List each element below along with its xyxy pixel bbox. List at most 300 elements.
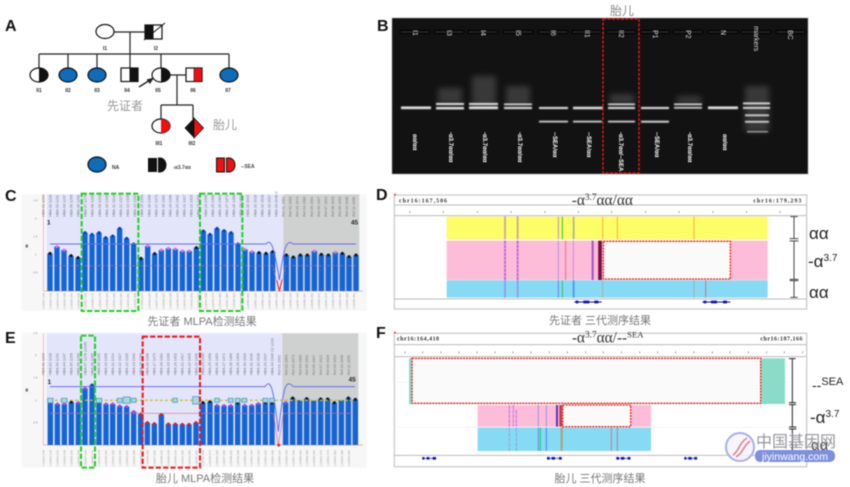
probe labels: HBA-03 1231 — [55, 195, 59, 217]
heading: F: F — [376, 325, 386, 342]
size labels: L10428-172 — [90, 450, 94, 466]
probe labels: HBA-13 1335 — [126, 195, 130, 217]
chart E: 1 — [48, 379, 52, 386]
lane labels: I1 — [411, 30, 418, 36]
probe labels: Ref-09 1633 — [338, 197, 342, 217]
chart E: 8 — [25, 388, 28, 394]
size labels: L10430-184 — [104, 450, 108, 466]
probe labels: HBA-34 1545 C2 1234 — [271, 338, 275, 375]
title: SEA — [627, 330, 644, 340]
panel A: pedigree — [5, 18, 255, 172]
reference lines — [50, 384, 355, 432]
panel F: fetus sequencing: αα — [811, 437, 829, 454]
probe labels: Ref-04 1586 — [303, 197, 307, 217]
probe labels: Ref-05 1591 — [310, 197, 314, 217]
size labels: L10464-388 — [345, 293, 349, 309]
band haze — [438, 76, 769, 132]
probe labels: Ref-11 1656 — [347, 355, 351, 375]
pedigree labels: II6 — [190, 88, 196, 94]
probe labels: HBA-05 1259 — [70, 195, 74, 217]
genotype labels: -α3.7αα/αα — [686, 132, 692, 163]
pedigree labels: II1 — [36, 88, 42, 94]
lane labels: P2 — [684, 30, 691, 39]
probe labels: HBA-29 1494 — [236, 353, 240, 375]
probe labels: HBA-21 1417 — [180, 353, 184, 375]
probe labels: HBA-10 1306 — [104, 353, 108, 375]
genotype labels: --SEA/αα — [585, 132, 591, 158]
probe labels: HBA-33 1537 — [267, 195, 271, 217]
probe labels: HBA-24 1446 — [201, 353, 205, 375]
caption E: 胎儿 MLPA检测结果 — [156, 471, 254, 485]
chart C: 1 — [35, 253, 37, 257]
probe labels: HBA-08 1285 — [91, 195, 95, 217]
size labels: L10424-148 — [63, 450, 67, 466]
caption C: 先证者 MLPA检测结果 — [147, 314, 257, 328]
size labels: L10445-274 — [211, 293, 215, 309]
size labels: L10456-340 — [284, 450, 288, 466]
size labels: L10440-244 — [173, 450, 177, 466]
size labels: L10463-382 — [338, 293, 342, 309]
probe labels: Ref-01 1552 — [277, 355, 281, 375]
probe labels: Ref-08 1629 — [331, 197, 335, 217]
gel background — [392, 18, 808, 174]
probe labels: HBA-18 1381 — [160, 353, 164, 375]
sequencing view D: chr16:179,293 — [753, 198, 802, 204]
gel bands — [401, 102, 770, 132]
genotype labels F: SEA — [821, 376, 844, 388]
size labels: L10438-232 — [161, 293, 165, 309]
probe labels: Ref-10 1648 — [345, 197, 349, 217]
probe labels: HBA-28 1489 — [232, 195, 236, 217]
probe labels: HBA-04 1247 — [63, 353, 67, 375]
highlight box: deletion — [143, 337, 200, 468]
caption F: 胎儿 三代测序结果 — [554, 471, 646, 485]
title: -α — [572, 330, 585, 347]
lane labels: I4 — [479, 30, 486, 36]
genotype labels: αα/αα — [721, 134, 727, 151]
size labels: L10421-130 — [42, 450, 46, 466]
size labels: L10457-346 — [296, 293, 300, 309]
probe labels: HBA-12 1327 — [119, 195, 123, 217]
size labels: L10431-190 — [111, 450, 115, 466]
sequencing view D — [394, 192, 807, 309]
probe labels: HBA-20 1402 — [173, 353, 177, 375]
probe labels: Ref-05 1591 — [305, 355, 309, 375]
probe labels: HBA-26 1463 — [218, 195, 222, 217]
size labels: L10450-304 — [246, 293, 250, 309]
sequencing view D: chr16:167,506 — [399, 198, 448, 204]
chart E: 2 — [35, 353, 37, 357]
probe labels: Ref-04 1586 — [298, 355, 302, 375]
individual II3 — [88, 68, 106, 82]
heading: A: A — [5, 18, 17, 35]
probe labels: Ref-07 1612 — [319, 355, 323, 375]
probe labels: HBA-20 1402 — [176, 195, 180, 217]
size labels: L10422-136 — [48, 293, 52, 309]
size labels: L10436-220 — [146, 450, 150, 466]
probe labels: HBA-16 1368 — [147, 195, 151, 217]
chart C: 2.5 — [33, 199, 38, 203]
read tracks — [409, 358, 785, 404]
chart E: 1.5 — [33, 376, 38, 380]
size labels: L10453-322 — [267, 293, 271, 309]
probe labels: HBA-25 1458 — [211, 195, 215, 217]
size labels: L10447-286 — [225, 293, 229, 309]
size labels: L10437-226 — [154, 293, 158, 309]
genotype labels: -α3.7αα/--SEA — [617, 132, 623, 172]
size labels: L10462-376 — [326, 450, 330, 466]
individual II6 — [186, 68, 202, 82]
chart C: 45 — [351, 220, 359, 227]
size labels: L10442-256 — [187, 450, 191, 466]
size labels: L10423-142 — [56, 450, 60, 466]
chart E: 1 — [35, 398, 37, 402]
size labels: L10457-346 — [291, 450, 295, 466]
genotype labels — [411, 132, 727, 172]
size labels: L10451-310 — [250, 450, 254, 466]
probe labels: HBA-23 1439 — [197, 195, 201, 217]
individual I1 — [96, 24, 114, 38]
fetus label: 胎儿 — [213, 118, 237, 132]
outlier markers — [48, 397, 274, 404]
genotype labels: --SEA/αα — [653, 132, 659, 158]
probe labels: HBA-13 1335 — [125, 353, 129, 375]
size labels: L10446-280 — [215, 450, 219, 466]
size labels: L10452-316 — [260, 293, 264, 309]
probe labels: HBA-01 1204 — [42, 353, 46, 375]
genotype labels D: αα — [809, 224, 829, 243]
size labels: L10443-262 — [197, 293, 201, 309]
watermark — [726, 433, 836, 463]
size labels: L10429-178 — [97, 450, 101, 466]
lane labels: II2 — [617, 30, 624, 38]
probe labels: HBA-27 1471 — [222, 353, 226, 375]
highlight boxes: duplicated probes — [82, 194, 242, 311]
legend — [88, 157, 255, 172]
size labels: L10449-298 — [236, 450, 240, 466]
probe labels: Ref-09 1633 — [333, 355, 337, 375]
probe labels: HBA-19 1396 — [167, 353, 171, 375]
size labels: L10434-208 — [132, 450, 136, 466]
size labels: L10432-196 — [118, 450, 122, 466]
size labels: L10433-202 — [126, 293, 130, 309]
panel F: fetus sequencing: -α — [810, 408, 826, 427]
highlight box: fetus lane — [603, 19, 639, 173]
size labels: L10435-214 — [140, 293, 144, 309]
title: 3.7 — [585, 331, 597, 341]
size labels: L10465-394 — [352, 293, 356, 309]
probe labels: HBA-25 1458 — [208, 353, 212, 375]
genotype labels: --SEA/αα — [551, 132, 557, 158]
probe labels: HBA-30 1503 — [243, 353, 247, 375]
chart E: 0.5 — [33, 421, 38, 425]
size labels: L10433-202 — [125, 450, 129, 466]
probe labels: HBA-06 1266 — [76, 353, 80, 375]
probe labels: HBA-08 1285 — [90, 353, 94, 375]
genotype labels: -α3.7αα/αα — [447, 132, 453, 163]
variant stripes — [505, 217, 706, 298]
size labels: L10441-250 — [183, 293, 187, 309]
sequencing view F — [394, 330, 807, 467]
genotype labels: αα/αα — [411, 134, 417, 151]
watermark logo — [726, 433, 754, 461]
individual II1 — [30, 68, 48, 82]
size labels: L10423-142 — [55, 293, 59, 309]
size labels: L10424-148 — [62, 293, 66, 309]
size labels: L10434-208 — [133, 293, 137, 309]
probe labels: HBA-18 1381 — [161, 195, 165, 217]
lane labels: BC — [786, 30, 793, 40]
probe labels: HBA-30 1503 — [246, 195, 250, 217]
probe labels: Ref-10 1648 — [340, 355, 344, 375]
probe labels: HBA-17 1373 — [153, 353, 157, 375]
probe labels: HBA-09 1293 — [97, 353, 101, 375]
size labels: L10439-238 — [168, 293, 172, 309]
probe labels: HBA-05 1259 — [69, 353, 73, 375]
proband label: 先证者 — [107, 99, 143, 113]
size labels: L10438-232 — [160, 450, 164, 466]
title: -α — [572, 192, 585, 209]
size labels: L10459-358 — [310, 293, 314, 309]
size labels: L10452-316 — [257, 450, 261, 466]
size labels: L10465-394 — [347, 450, 351, 466]
probe labels: HBA-15 1350 — [139, 353, 143, 375]
chart E: 2.5 — [33, 331, 38, 335]
individual II5 proband — [152, 68, 170, 82]
probe labels: HBA-02 1218 — [48, 195, 52, 217]
size labels: L10430-184 — [105, 293, 109, 309]
title: αα/-- — [597, 330, 627, 347]
heading: C: C — [5, 188, 17, 205]
lane labels: II1 — [583, 30, 590, 38]
size labels: L10442-256 — [190, 293, 194, 309]
size labels: L10449-298 — [239, 293, 243, 309]
legend: --SEA — [241, 164, 255, 170]
caption D: 先证者 三代测序结果 — [549, 313, 651, 327]
probe labels: HBA-22 1425 — [187, 353, 191, 375]
probe labels: HBA-19 1396 — [168, 195, 172, 217]
probe labels: Ref-06 1607 — [317, 197, 321, 217]
heading: D: D — [376, 187, 388, 204]
pedigree labels: III1 — [156, 141, 163, 147]
pedigree labels: II4 — [124, 88, 130, 94]
probe labels: HBA-27 1471 — [225, 195, 229, 217]
size labels: L10432-196 — [119, 293, 123, 309]
probe labels: HBA-06 1266 — [77, 195, 81, 217]
size labels: L10427-166 — [83, 450, 87, 466]
size labels: L10463-382 — [333, 450, 337, 466]
watermark text: 中国基因网 — [756, 433, 836, 451]
probe labels: HBA-34 1545 C — [274, 191, 278, 217]
pedigree labels: I1 — [103, 46, 107, 52]
probe labels: HBA-21 1417 — [183, 195, 187, 217]
size labels: L10444-268 — [204, 293, 208, 309]
probe labels: HBA-14 1342 — [132, 353, 136, 375]
probe labels: Ref-08 1629 — [326, 355, 330, 375]
probe labels: HBA-32 1528 — [260, 195, 264, 217]
probe labels: HBA-17 1373 — [154, 195, 158, 217]
size labels: L10439-238 — [167, 450, 171, 466]
MLPA bars — [48, 385, 358, 445]
size labels: L10458-352 — [298, 450, 302, 466]
probe labels: Ref-07 1612 — [324, 197, 328, 217]
probe labels: HBA-10 1306 — [105, 195, 109, 217]
MLPA bars — [47, 228, 359, 291]
lane labels: P1 — [651, 30, 658, 39]
arrow to proband — [139, 78, 154, 87]
probe labels: HBA-24 1446 — [204, 195, 208, 217]
size labels: L10460-364 — [317, 293, 321, 309]
individual II4 — [121, 68, 138, 82]
title: αα/αα — [597, 192, 633, 209]
size labels: L10453-322 — [264, 450, 268, 466]
size labels: L10445-274 — [208, 450, 212, 466]
lane labels: markers — [752, 26, 759, 52]
size labels: L10455-334 — [277, 450, 281, 466]
genotype labels: -α3.7αα/αα — [481, 132, 487, 163]
lane labels — [411, 26, 793, 52]
probe labels: HBA-12 1327 — [118, 353, 122, 375]
probe labels: HBA-02 1218 — [49, 353, 53, 375]
probe labels: HBA-11 1314 — [112, 195, 116, 217]
individual III1 — [152, 119, 170, 133]
size labels: L10444-268 — [201, 450, 205, 466]
gene track — [574, 300, 730, 303]
probe labels: HBA-07 1278 12345 — [83, 342, 87, 375]
size labels: L10448-292 — [229, 450, 233, 466]
probe labels: Ref-01 1552 — [282, 197, 286, 217]
panel C: proband MLPA chart — [5, 188, 367, 328]
individual III2 fetus — [184, 118, 204, 138]
size labels: L10447-286 — [222, 450, 226, 466]
panel D: proband sequencing: -α — [808, 252, 824, 271]
panel D: proband sequencing: 3.7 — [824, 253, 838, 264]
size labels: L10462-376 — [331, 293, 335, 309]
highlight box: duplication — [81, 336, 95, 468]
sequencing view F: chr16:164,418 — [397, 336, 440, 342]
size labels: L10437-226 — [153, 450, 157, 466]
probe labels: HBA-31 1516 — [253, 195, 257, 217]
size labels: L10422-136 — [49, 450, 53, 466]
lane labels: I3 — [445, 30, 452, 36]
read tracks — [447, 217, 768, 239]
chart C: 0.5 — [33, 271, 38, 275]
heading: E: E — [5, 330, 16, 347]
size labels: L10455-334 — [282, 293, 286, 309]
chart E — [22, 331, 367, 468]
size labels: L10461-370 — [319, 450, 323, 466]
pedigree labels: III2 — [189, 141, 196, 147]
probe labels: HBA-22 1425 — [190, 195, 194, 217]
individual I2 — [144, 23, 165, 40]
probe labels: HBA-11 1314 — [111, 353, 115, 375]
probe labels: Ref-02 1569 — [284, 355, 288, 375]
size labels: L10446-280 — [218, 293, 222, 309]
probe labels: HBA-31 1516 — [250, 353, 254, 375]
fetus label above gel: 胎儿 — [610, 4, 634, 18]
chart C: 8 — [25, 243, 28, 249]
size labels: L10428-172 — [91, 293, 95, 309]
size labels: L10451-310 — [253, 293, 257, 309]
legend: -α3.7αα — [173, 165, 192, 171]
probe labels: HBA-29 1494 — [239, 195, 243, 217]
probe labels: HBA-33 1537 — [264, 353, 268, 375]
size labels: L10441-250 — [180, 450, 184, 466]
probe labels: HBA-04 1247 — [62, 195, 66, 217]
size labels: L10459-358 — [305, 450, 309, 466]
chart C: 1 — [47, 220, 51, 227]
probe labels: HBA-16 1368 — [146, 353, 150, 375]
genotype labels: -α3.7αα/αα — [516, 132, 522, 163]
probe labels: Ref-03 1574 — [296, 197, 300, 217]
probe labels: Ref-02 1569 — [289, 197, 293, 217]
watermark URL: jiyinwang.com — [761, 451, 828, 463]
legend: NA — [112, 165, 120, 171]
title: 3.7 — [585, 193, 597, 203]
size labels: L10464-388 — [340, 450, 344, 466]
lane labels: N — [719, 30, 726, 35]
size labels: L10460-364 — [312, 450, 316, 466]
sequencing view F: chr16:187,166 — [760, 336, 803, 342]
size labels: L10454-328 — [271, 450, 275, 466]
pedigree labels: II3 — [94, 88, 100, 94]
probe labels: HBA-01 1204 — [41, 195, 45, 217]
reference lines — [50, 242, 356, 280]
size labels: L10427-166 — [84, 293, 88, 309]
highlight box: deletion — [603, 241, 730, 279]
size labels: L10440-244 — [176, 293, 180, 309]
chart C: 2 — [35, 217, 37, 221]
pedigree labels: II7 — [225, 88, 231, 94]
panel F: fetus sequencing — [376, 325, 844, 485]
probe labels: HBA-32 1528 — [257, 353, 261, 375]
pedigree labels: II5 — [155, 88, 161, 94]
chart C: 1.5 — [33, 235, 38, 239]
size labels: L10450-304 — [243, 450, 247, 466]
lane labels: I5 — [514, 30, 521, 36]
size labels: L10458-352 — [303, 293, 307, 309]
panel E: fetus MLPA chart — [5, 330, 367, 485]
size labels: L10436-220 — [147, 293, 151, 309]
size labels: L10443-262 — [194, 450, 198, 466]
pedigree connecting lines — [39, 32, 229, 119]
probe labels: Ref-11 1656 — [352, 197, 356, 217]
size labels: L10429-178 — [98, 293, 102, 309]
lane labels: I6 — [549, 30, 556, 36]
size labels: L10425-154 — [70, 293, 74, 309]
chart E: 45 — [349, 377, 356, 384]
panel B: gel electrophoresis — [377, 4, 808, 174]
highlight box: SEA deletion — [412, 358, 761, 403]
individual II7 — [220, 68, 238, 82]
probe labels: HBA-28 1489 — [229, 353, 233, 375]
probe labels: HBA-23 1439 — [194, 353, 198, 375]
probe labels: Ref-06 1607 — [312, 355, 316, 375]
panel D: proband sequencing — [376, 187, 838, 327]
size labels: L10454-328 — [274, 293, 278, 309]
size labels: L10426-160 — [77, 293, 81, 309]
probe labels: Ref-03 1574 — [291, 355, 295, 375]
size labels: L10431-190 — [112, 293, 116, 309]
pedigree labels: I2 — [154, 46, 158, 52]
panel F: fetus sequencing: 3.7 — [826, 409, 840, 420]
size labels: L10448-292 — [232, 293, 236, 309]
probe labels: HBA-03 1231 — [56, 353, 60, 375]
panel D: proband sequencing: αα — [809, 283, 829, 302]
genotype labels F: -- — [812, 377, 821, 393]
probe labels: HBA-14 1342 — [133, 195, 137, 217]
probe labels: HBA-07 1278 — [84, 195, 88, 217]
